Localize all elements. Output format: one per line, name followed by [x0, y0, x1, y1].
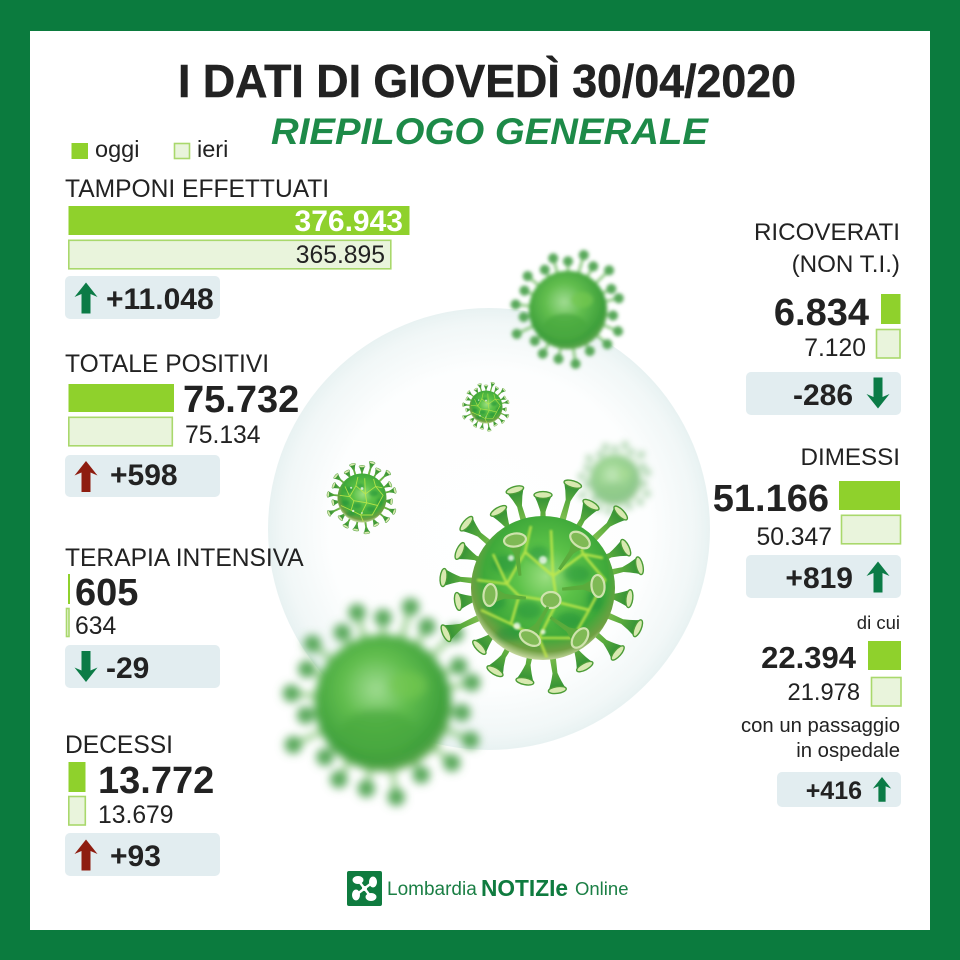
icon: arrow down: [74, 651, 98, 682]
value: ricoverati oggi: 6.834: [774, 292, 869, 334]
delta: dimessi: +819: [785, 562, 853, 595]
delta box: di cui: [777, 772, 901, 807]
bar: positivi oggi: [68, 384, 174, 412]
panel: ricoverati: [746, 219, 901, 415]
text: online: Online: [575, 878, 628, 899]
heading: tamponi: TAMPONI EFFETTUATI: [65, 176, 329, 203]
subheading: non t.i.: (NON T.I.): [792, 251, 900, 278]
subtitle: RIEPILOGO GENERALE: [271, 110, 709, 152]
panel: tamponi: [65, 176, 410, 319]
virus: large sharp: [439, 478, 645, 695]
bar: terapia oggi: [68, 574, 70, 604]
bar: dimessi ieri: [842, 515, 900, 544]
illustration: bubble background: [268, 308, 710, 750]
value: dimessi ieri: 50.347: [756, 524, 832, 551]
text: con un passaggio in ospedale: con un passaggio: [741, 715, 900, 737]
value: dimessi oggi: 51.166: [713, 478, 829, 520]
delta: positivi: +598: [110, 459, 178, 492]
text: lombardia: Lombardia: [387, 879, 477, 900]
delta box: positivi: [65, 455, 220, 497]
heading: dimessi: DIMESSI: [801, 444, 900, 471]
bar: positivi ieri: [69, 417, 172, 446]
title: I DATI DI GIOVEDÌ 30/04/2020: [178, 55, 796, 107]
heading: ricoverati: RICOVERATI: [754, 219, 900, 246]
virus: faint blurred right: [578, 441, 652, 518]
value: terapia oggi: 605: [75, 572, 138, 614]
value: tamponi ieri: 365.895: [296, 242, 385, 269]
text: con un passaggio in ospedale: in ospedale: [796, 740, 900, 762]
heading: totale positivi: TOTALE POSITIVI: [65, 351, 269, 378]
bar: tamponi oggi: [68, 206, 410, 235]
heading: terapia intensiva: TERAPIA INTENSIVA: [65, 545, 304, 572]
panel: totale positivi: [65, 351, 299, 497]
panel: terapia intensiva: [65, 545, 304, 688]
panel: di cui: [741, 612, 901, 807]
icon: arrow down: [866, 378, 890, 408]
legend: [72, 136, 228, 162]
virus: blurred top: [510, 249, 625, 369]
bar: terapia ieri: [66, 608, 69, 636]
virus: small left: [327, 461, 397, 534]
value: decessi oggi: 13.772: [98, 760, 214, 802]
delta box: terapia: [65, 645, 220, 688]
heading: decessi: DECESSI: [65, 732, 173, 759]
delta: ricoverati: -286: [793, 379, 853, 412]
delta box: tamponi: [65, 276, 220, 319]
virus: blurred bottom-left: [282, 596, 482, 807]
value: tamponi oggi: 376.943: [295, 205, 403, 238]
text: notizie: NOTIZIe: [481, 875, 568, 901]
delta: decessi: +93: [110, 840, 161, 873]
bar: decessi oggi: [68, 762, 86, 792]
icon: arrow up small: [873, 777, 891, 802]
icon: arrow up red: [74, 840, 98, 870]
delta box: dimessi: [746, 555, 901, 598]
panel: decessi: [65, 732, 220, 876]
legend: oggi: [95, 136, 139, 162]
value: di cui ieri: 21.978: [788, 680, 860, 706]
bar: ricoverati oggi: [881, 294, 900, 324]
legend: ieri: [197, 136, 228, 162]
logo: Lombardia Notizie Online: [347, 871, 628, 906]
value: ricoverati ieri: 7.120: [804, 335, 866, 362]
text: di cui: di cui: [857, 612, 900, 633]
delta: terapia: -29: [106, 652, 149, 685]
delta: di cui: +416: [806, 777, 862, 805]
value: decessi ieri: 13.679: [98, 802, 174, 829]
value: positivi ieri: 75.134: [185, 422, 261, 449]
delta box: ricoverati: [746, 372, 901, 415]
delta box: decessi: [65, 833, 220, 876]
delta: tamponi: +11.048: [106, 283, 214, 316]
value: di cui oggi: 22.394: [761, 640, 857, 675]
virus: small center: [462, 382, 509, 432]
bar: di cui ieri: [872, 678, 901, 706]
icon: arrow up: [866, 562, 890, 592]
bar: dimessi oggi: [839, 481, 900, 510]
icon: arrow up red: [74, 461, 98, 492]
bar: decessi ieri: [69, 796, 85, 825]
icon: rosa camuna: [347, 871, 382, 906]
icon: arrow up: [74, 282, 98, 314]
value: positivi oggi: 75.732: [183, 379, 299, 421]
bar: tamponi ieri: [69, 240, 391, 269]
bar: di cui oggi: [868, 641, 901, 670]
value: terapia ieri: 634: [75, 613, 116, 640]
panel: dimessi: [713, 444, 901, 598]
bar: ricoverati ieri: [876, 330, 900, 358]
